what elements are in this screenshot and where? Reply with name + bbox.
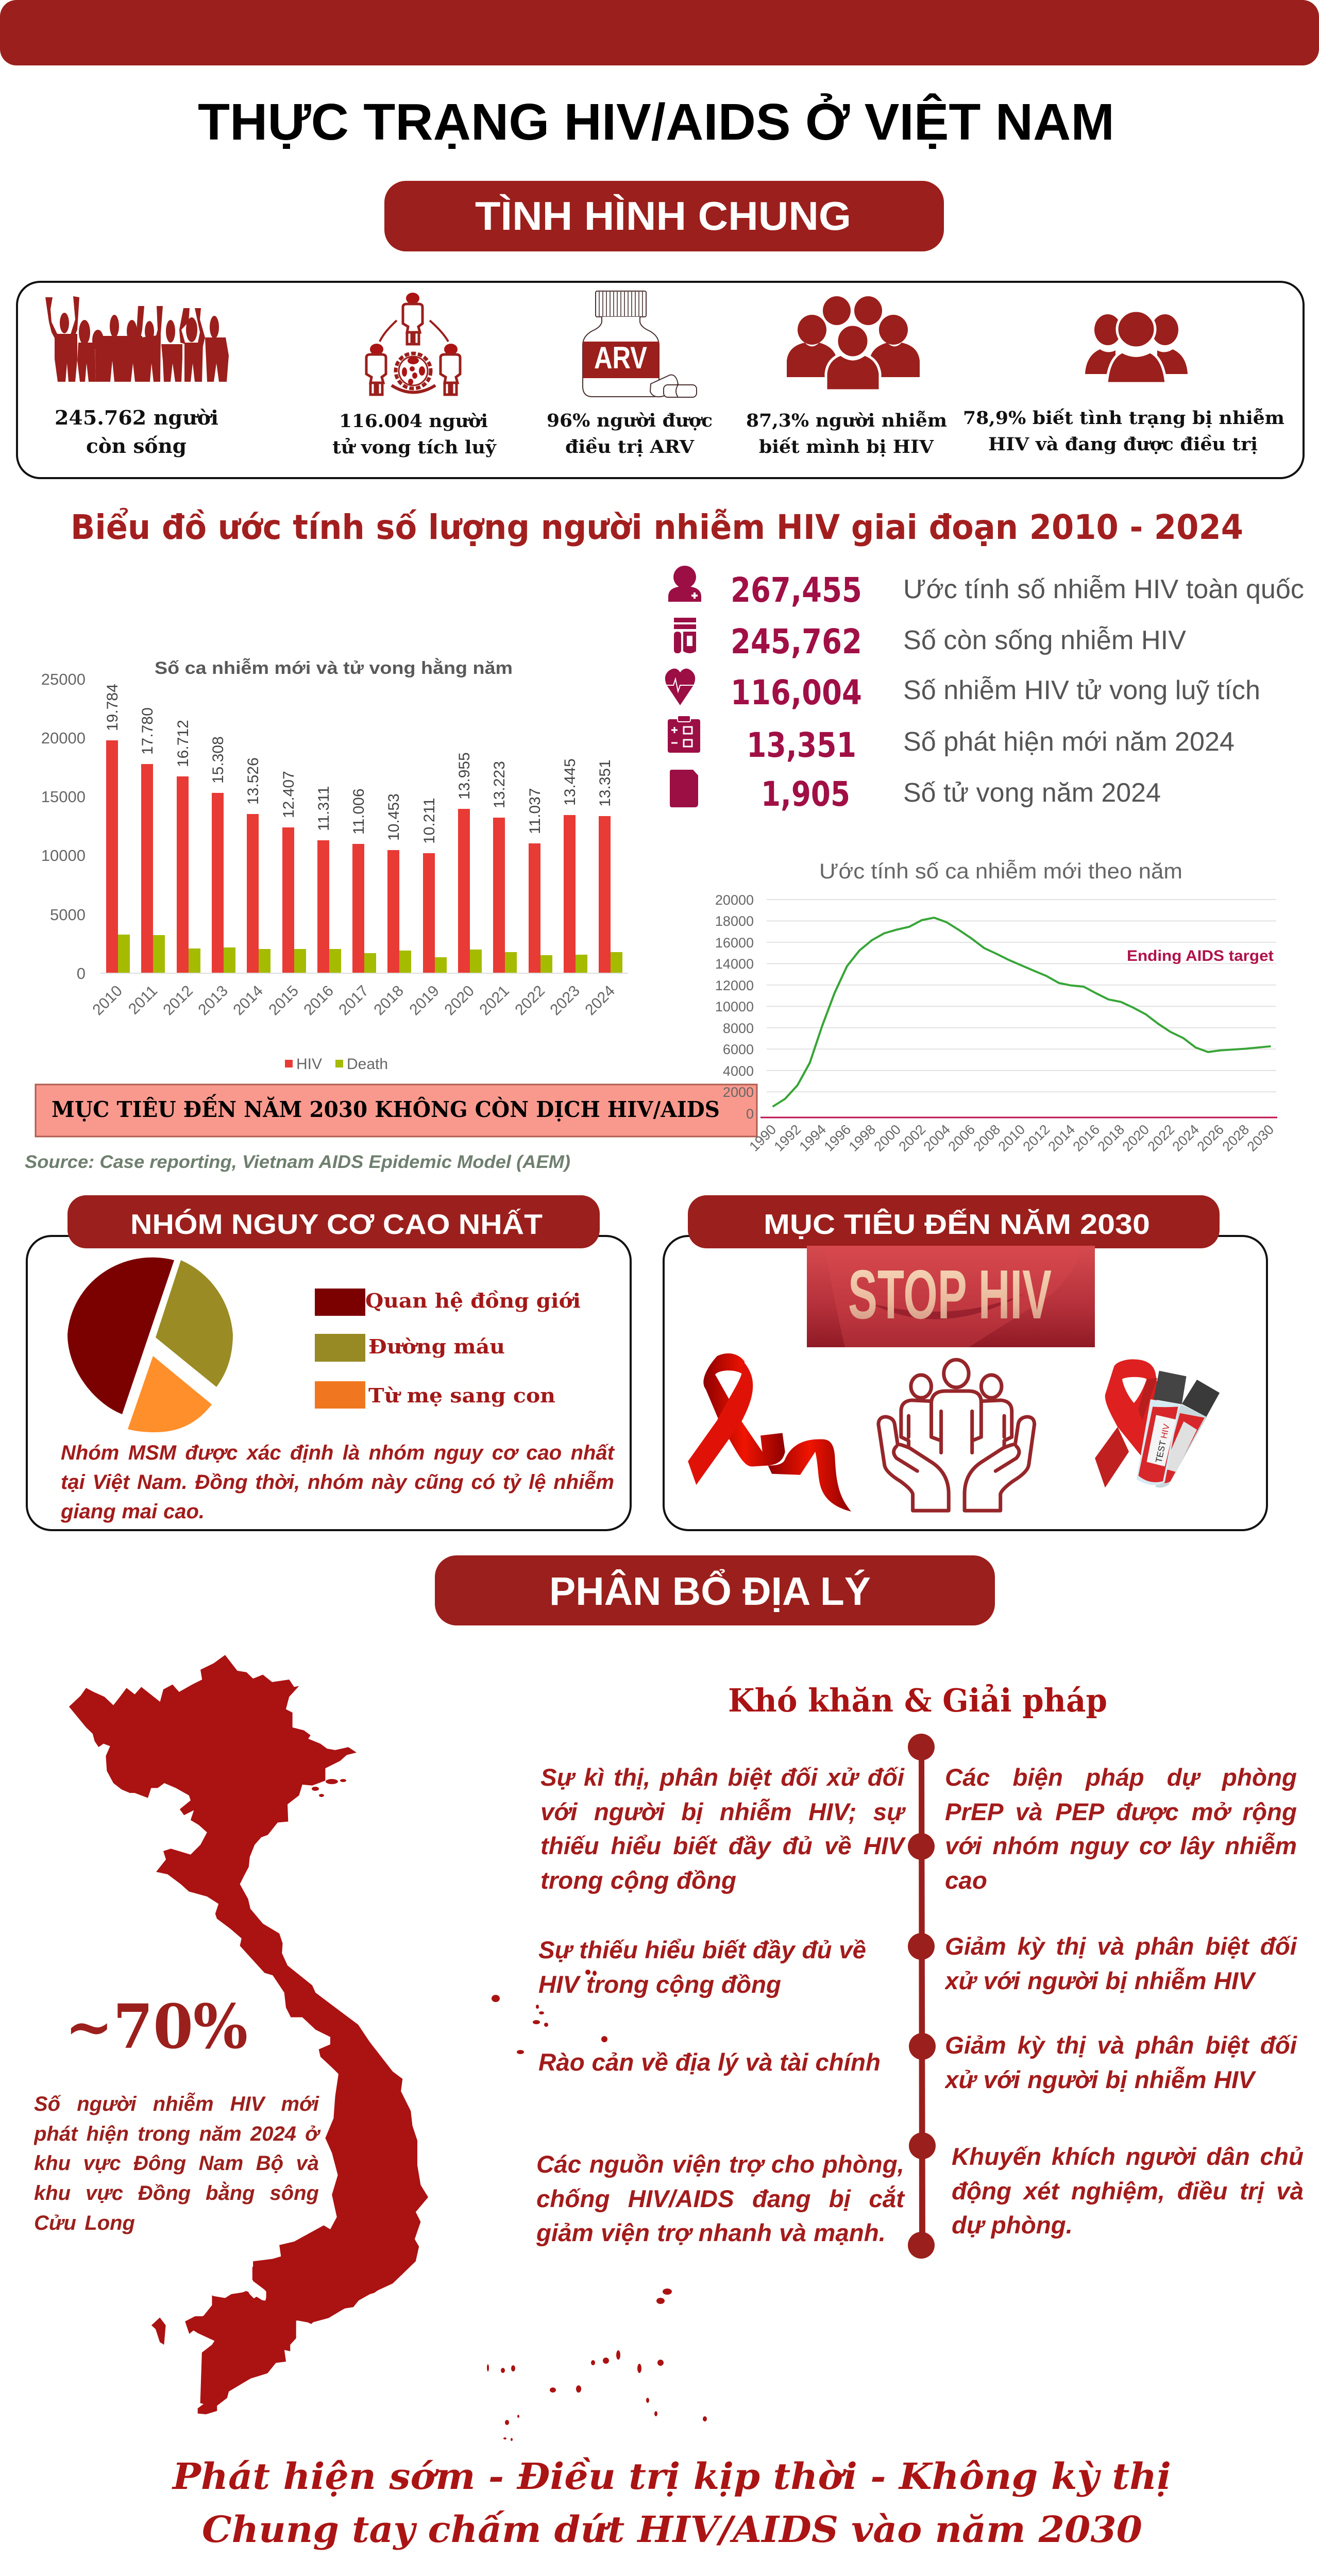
y axis labels: 10000 [41, 846, 86, 865]
timeline spine [908, 1734, 936, 2259]
y axis labels: 6000 [723, 1042, 754, 1057]
y axis labels: 10000 [715, 999, 754, 1014]
x axis labels: 2013 [195, 982, 231, 1019]
y axis labels: 15000 [41, 788, 86, 806]
stat text: treated with ARV: 96% người được [547, 410, 713, 431]
challenge: geography and finance: Rào cản về địa lý và tài chính [538, 2049, 881, 2076]
figure: newly detected 2024 [747, 725, 1235, 765]
legend: Death [347, 1056, 388, 1073]
x axis labels: 1998 [846, 1122, 878, 1155]
value labels: 10.453 [385, 793, 402, 841]
icon: heart with pulse [665, 669, 696, 705]
x axis labels: 2000 [871, 1122, 904, 1155]
x axis labels: 2006 [945, 1122, 978, 1155]
value labels: 11.006 [350, 788, 367, 835]
section heading: 2030 goals [688, 1195, 1220, 1248]
chart title: Số ca nhiễm mới và tử vong hằng năm [155, 658, 513, 678]
section heading: geographic distribution: PHÂN BỔ ĐỊA LÝ [549, 1569, 871, 1614]
text: regional share of new cases [34, 2090, 328, 2240]
heading: challenges and solutions: Khó khăn & Giải pháp [728, 1682, 1107, 1719]
x axis labels: 2008 [971, 1122, 1003, 1155]
legend: blood: Đường máu [368, 1335, 505, 1358]
stat text: know status: 87,3% người nhiễm [746, 410, 947, 431]
infection curve [773, 918, 1271, 1107]
y axis labels: 18000 [715, 913, 754, 929]
image: stop HIV banner [807, 1246, 1095, 1347]
icon: person with plus [668, 566, 701, 602]
death bars [118, 935, 622, 973]
callout: 2030 goal [36, 1084, 757, 1137]
figure: newly detected 2024: Số phát hiện mới năm 2024 [903, 727, 1235, 757]
statistic: 70 percent: ~70% [65, 1991, 248, 2062]
chart title: Ước tính số ca nhiễm mới theo năm [819, 859, 1182, 883]
x axis labels [747, 1122, 1277, 1155]
text: regional share of new cases: Số người nhiễm HIV mới [34, 2093, 319, 2115]
x axis labels: 2023 [547, 982, 583, 1019]
pie chart [67, 1258, 233, 1432]
key figures list [665, 566, 1304, 814]
figure: deaths 2024: 1,905 [761, 774, 850, 814]
value labels: 17.780 [139, 707, 156, 755]
x axis labels: 2010 [89, 982, 126, 1019]
solution: reduce discrimination: Giảm kỳ thị và phân biệt đối [945, 2032, 1297, 2059]
figure: living: Số còn sống nhiễm HIV [903, 625, 1186, 655]
icon: clipboard [668, 716, 700, 753]
x axis labels: 1996 [821, 1122, 854, 1155]
challenge: lack of knowledge [538, 1934, 909, 2003]
challenge: lack of knowledge: Sự thiếu hiểu biết đầy đủ về [538, 1937, 866, 1964]
callout: 2030 goal: MỤC TIÊU ĐẾN NĂM 2030 KHÔNG CÒN DỊCH HIV/AIDS [52, 1093, 720, 1122]
legend: HIV [296, 1056, 322, 1073]
closing slogan: Phát hiện sớm - Điều trị kịp thời - Không kỳ thị [172, 2455, 1171, 2498]
stat text: treated with ARV [547, 410, 713, 457]
y axis labels: 4000 [723, 1063, 754, 1079]
y axis labels: 0 [746, 1106, 754, 1122]
value labels: 13.526 [245, 757, 262, 805]
section heading: geographic distribution [435, 1555, 995, 1625]
y axis labels [715, 892, 754, 1122]
legend: same-sex relations: Quan hệ đồng giới [365, 1289, 581, 1312]
stat text: cumulative deaths: 116.004 người [339, 411, 488, 432]
value labels: 12.407 [280, 771, 297, 818]
figure: cumulative deaths: 116,004 [731, 673, 862, 713]
stat text: living: còn sống [86, 434, 187, 457]
icon: ARV medicine bottle [583, 291, 697, 397]
icon: hands holding people [878, 1360, 1035, 1511]
challenge: stigma: Sự kì thị, phân biệt đối xử đối [540, 1764, 904, 1791]
stat text: living: 245.762 người [55, 406, 218, 429]
challenge: funding cuts: chống HIV/AIDS đang bị cắt [536, 2185, 904, 2213]
y axis labels: 20000 [41, 729, 86, 747]
y axis labels: 8000 [723, 1021, 754, 1036]
legend [285, 1056, 388, 1073]
value labels: 10.211 [421, 798, 438, 844]
section heading: general situation: TÌNH HÌNH CHUNG [475, 193, 851, 239]
challenge: stigma: với người bị nhiễm HIV; sự [540, 1799, 904, 1826]
figure: cumulative deaths: Số nhiễm HIV tử vong luỹ tích [903, 675, 1260, 705]
stat text: cumulative deaths: tử vong tích luỹ [332, 437, 497, 458]
stat text: cumulative deaths [332, 411, 497, 458]
text: MSM note [61, 1438, 622, 1527]
x axis labels: 2014 [1045, 1122, 1078, 1155]
figure: deaths 2024: Số tử vong năm 2024 [903, 778, 1161, 808]
icon: red ribbon [688, 1353, 851, 1512]
value labels [104, 684, 614, 844]
y axis labels: 14000 [715, 956, 754, 972]
x axis labels: 2020 [1120, 1122, 1152, 1155]
value labels: 13.445 [562, 758, 579, 806]
y axis labels [41, 670, 86, 982]
value labels: 11.037 [527, 788, 544, 834]
challenge: funding cuts: Các nguồn viện trợ cho phòng, [536, 2151, 904, 2178]
heading: estimate chart: Biểu đồ ước tính số lượng người nhiễm HIV giai đoạn 2010 - 2024 [71, 507, 1243, 547]
challenge: stigma: trong cộng đồng [540, 1867, 736, 1894]
stat text: living [55, 406, 218, 457]
icon: document [670, 770, 698, 807]
value labels: 15.308 [210, 736, 227, 784]
figure: living: 245,762 [731, 622, 862, 662]
x axis labels: 2024 [1170, 1122, 1202, 1155]
solution: encourage testing [952, 2140, 1312, 2244]
target label: Ending AIDS target [1127, 947, 1274, 964]
value labels: 13.351 [597, 759, 614, 807]
challenge: lack of knowledge: HIV trong cộng đồng [538, 1971, 781, 1998]
solution: encourage testing: Khuyến khích người dân chủ [952, 2143, 1304, 2171]
solution: reduce stigma: xử với người bị nhiễm HIV [945, 1968, 1255, 1995]
figure: newly detected 2024: 13,351 [747, 725, 856, 765]
top banner [0, 0, 1319, 65]
text: MSM note: Nhóm MSM được xác định là nhóm nguy cơ cao nhất [61, 1442, 614, 1464]
solution: PrEP and PEP: cao [945, 1867, 987, 1894]
title: THỰC TRẠNG HIV/AIDS Ở VIỆT NAM [198, 93, 1114, 151]
figure: cumulative deaths [731, 673, 1260, 713]
solution: reduce stigma: Giảm kỳ thị và phân biệt đối [945, 1933, 1297, 1960]
stat text: know status and treated [963, 408, 1284, 455]
x axis labels: 2014 [230, 982, 266, 1019]
value labels: 11.311 [315, 786, 332, 831]
y axis labels: 2000 [723, 1084, 754, 1100]
image: stop HIV banner: STOP HIV [848, 1256, 1052, 1333]
x axis labels: 2028 [1220, 1122, 1252, 1155]
legend: same-sex relations [315, 1289, 581, 1316]
x axis labels: 2018 [1095, 1122, 1127, 1155]
x axis labels: 2019 [406, 982, 443, 1019]
icon: ARV medicine bottle: ARV [594, 341, 647, 375]
x axis labels: 2010 [995, 1122, 1028, 1155]
HIV bars [106, 740, 611, 973]
value labels: 13.955 [456, 752, 473, 800]
text: MSM note: giang mai cao. [61, 1500, 205, 1523]
solution: PrEP and PEP: Các biện pháp dự phòng [945, 1764, 1297, 1791]
solution: PrEP and PEP [945, 1761, 1306, 1899]
x axis labels: 2021 [476, 982, 513, 1019]
legend: blood [315, 1334, 505, 1362]
legend: mother to child: Từ mẹ sang con [368, 1384, 555, 1407]
bar chart: new infections and deaths [41, 658, 628, 1073]
section heading: highest risk groups [67, 1195, 600, 1248]
x axis labels: 2012 [1020, 1122, 1053, 1155]
icon: care cycle with virus [366, 293, 460, 395]
y axis labels: 25000 [41, 670, 86, 688]
legend: mother to child [315, 1381, 555, 1409]
x axis labels: 2012 [160, 982, 196, 1019]
y axis labels: 0 [77, 964, 86, 982]
line chart: estimated new infections [715, 859, 1277, 1155]
closing slogan [172, 2455, 1171, 2551]
stat text: know status and treated: HIV và đang được điều trị [988, 434, 1258, 455]
x axis labels: 2004 [921, 1122, 953, 1155]
icon: group of five people [787, 296, 920, 391]
value labels: 16.712 [175, 720, 192, 767]
solution: reduce discrimination [945, 2029, 1306, 2098]
stat text: know status and treated: 78,9% biết tình trạng bị nhiễm [963, 408, 1284, 429]
solution: PrEP and PEP: với nhóm nguy cơ lây nhiễm [945, 1833, 1297, 1860]
x axis labels: 2018 [370, 982, 407, 1019]
x axis labels: 1990 [747, 1122, 779, 1155]
x axis labels [89, 982, 618, 1019]
solution: reduce stigma [945, 1930, 1306, 1999]
x axis labels: 1994 [797, 1122, 829, 1155]
x axis labels: 1992 [771, 1122, 804, 1155]
x axis labels: 2015 [265, 982, 302, 1019]
y axis labels: 5000 [50, 906, 86, 924]
figure: living [731, 622, 1186, 662]
x axis labels: 2026 [1194, 1122, 1227, 1155]
section heading: highest risk groups: NHÓM NGUY CƠ CAO NHẤT [130, 1208, 543, 1240]
solution: reduce discrimination: xử với người bị nhiễm HIV [945, 2066, 1255, 2094]
challenge: stigma [540, 1761, 911, 1899]
x axis labels: 2016 [300, 982, 337, 1019]
y axis labels: 16000 [715, 935, 754, 951]
section heading: 2030 goals: MỤC TIÊU ĐẾN NĂM 2030 [764, 1208, 1150, 1240]
solution: PrEP and PEP: PrEP và PEP được mở rộng [945, 1799, 1297, 1826]
x axis labels: 2030 [1244, 1122, 1277, 1155]
x axis labels: 2020 [441, 982, 478, 1019]
stat text: know status [746, 410, 947, 457]
x axis labels: 2016 [1070, 1122, 1103, 1155]
challenge: funding cuts: giảm viện trợ nhanh và mạnh. [536, 2219, 886, 2247]
text: regional share of new cases: phát hiện trong năm 2024 ở [34, 2123, 319, 2145]
x axis labels: 2002 [896, 1122, 928, 1155]
solution: encourage testing: dự phòng. [952, 2212, 1073, 2239]
map of Vietnam [69, 1655, 707, 2441]
source note: Source: Case reporting, Vietnam AIDS Epidemic Model (AEM) [25, 1152, 570, 1172]
challenge: funding cuts [536, 2148, 912, 2251]
icon: ribbon with HIV test tubes [1095, 1359, 1220, 1488]
text: regional share of new cases: khu vực Đông Nam Bộ và [34, 2152, 319, 2175]
section heading: general situation [384, 181, 944, 251]
figure: deaths 2024 [761, 774, 1161, 814]
value labels: 13.223 [491, 761, 508, 808]
solution: encourage testing: động xét nghiệm, điều trị và [952, 2178, 1304, 2205]
figure: estimated total: 267,455 [731, 570, 862, 610]
text: regional share of new cases: Cửu Long [34, 2212, 135, 2234]
panel: 2030 goals [664, 1195, 1267, 1530]
x axis labels: 2011 [125, 982, 161, 1018]
value labels: 19.784 [104, 684, 121, 731]
icon: medicine [674, 618, 696, 653]
y axis labels: 12000 [715, 978, 754, 993]
panel: general statistics [17, 282, 1304, 478]
figure: estimated total: Ước tính số nhiễm HIV toàn quốc [903, 574, 1304, 604]
icon: group of three people [1085, 311, 1188, 383]
tube label text: TEST HIV [1154, 1423, 1172, 1464]
text: regional share of new cases: khu vực Đồng bằng sông [34, 2182, 319, 2205]
figure: estimated total [731, 570, 1304, 610]
x axis labels: 2022 [512, 982, 548, 1019]
challenge: stigma: thiếu hiểu biết đầy đủ về HIV [540, 1833, 904, 1860]
closing slogan: Chung tay chấm dứt HIV/AIDS vào năm 2030 [202, 2508, 1142, 2551]
icon: crowd of people [45, 296, 229, 382]
x axis labels: 2017 [335, 982, 372, 1019]
text: MSM note: tại Việt Nam. Đồng thời, nhóm này cũng có tỷ lệ nhiễm [61, 1471, 614, 1494]
y axis labels: 20000 [715, 892, 754, 908]
stat text: treated with ARV: điều trị ARV [565, 436, 695, 457]
x axis labels: 2022 [1145, 1122, 1177, 1155]
x axis labels: 2024 [582, 982, 618, 1019]
stat text: know status: biết mình bị HIV [759, 436, 934, 457]
panel: highest risk groups [27, 1195, 631, 1530]
